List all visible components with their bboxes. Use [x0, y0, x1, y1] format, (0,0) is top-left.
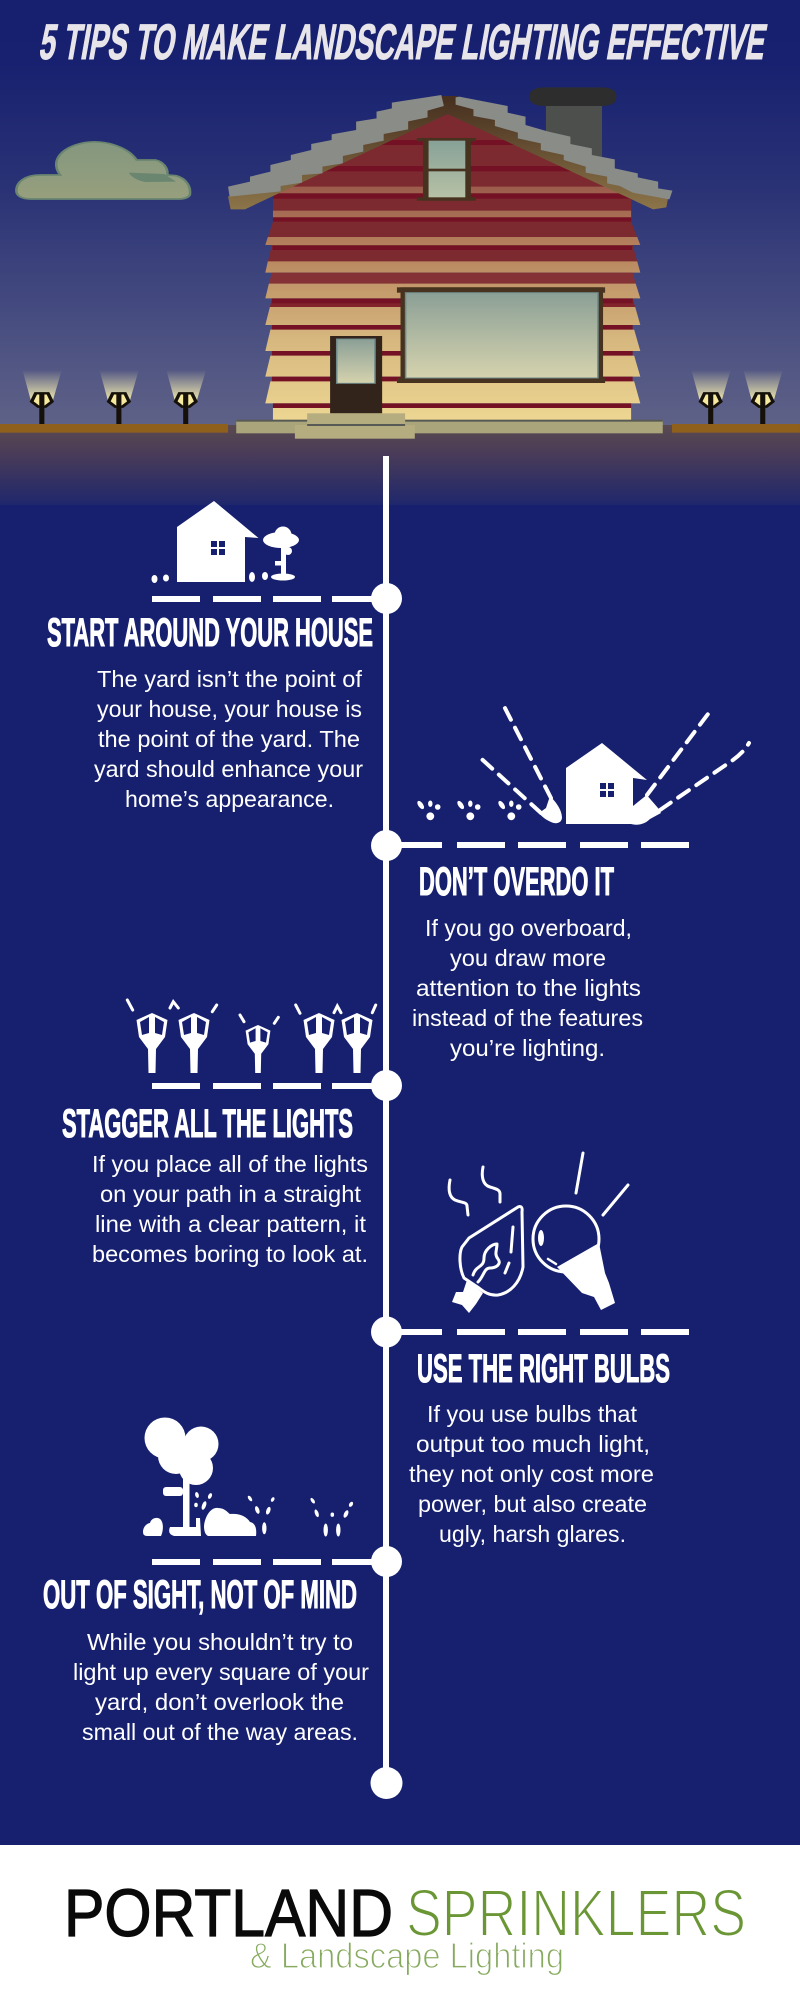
icon: tree, shrubs and small lights [143, 1418, 354, 1536]
body text [92, 1151, 368, 1267]
panel: tip 5 [43, 1418, 402, 1745]
body text: on your path in a straight [100, 1181, 362, 1207]
roof [228, 95, 672, 209]
ground strips [0, 424, 800, 433]
body text: While you shouldn’t try to [87, 1629, 353, 1655]
illustration: cloud and house [0, 87, 800, 439]
timeline node [371, 1070, 402, 1101]
logo wordmark black: PORTLAND [64, 1876, 393, 1951]
hot bulb [449, 1167, 523, 1295]
body text: becomes boring to look at. [92, 1241, 368, 1267]
cloud [16, 142, 190, 199]
body text: instead of the features [412, 1005, 643, 1031]
panel: tip 1 [47, 501, 402, 812]
path lights right [691, 370, 783, 424]
heading: DON’T OVERDO IT [419, 860, 614, 904]
foundation and steps [236, 413, 663, 439]
efficient bulb [533, 1153, 628, 1310]
heading: START AROUND YOUR HOUSE [47, 611, 373, 655]
body text: attention to the lights [416, 975, 641, 1001]
icon: house and tree [152, 501, 299, 583]
heading: STAGGER ALL THE LIGHTS [62, 1102, 353, 1146]
timeline node [371, 583, 402, 614]
sky gradient [0, 0, 800, 426]
timeline node [371, 1546, 402, 1577]
body text: line with a clear pattern, it [95, 1211, 367, 1237]
panel: tip 3 [62, 1000, 402, 1267]
body text: power, but also create [418, 1491, 647, 1517]
timeline node [371, 1316, 402, 1348]
door [330, 336, 382, 413]
body text: you draw more [450, 945, 606, 971]
path lights left [22, 370, 206, 424]
panel: tip 4 [371, 1153, 689, 1547]
upper window [417, 138, 476, 201]
body text: The yard isn’t the point of [97, 666, 363, 692]
timeline spine [383, 456, 389, 1783]
heading: OUT OF SIGHT, NOT OF MIND [43, 1573, 357, 1617]
connector dashes [152, 1559, 376, 1565]
body text: If you go overboard, [425, 915, 632, 941]
body text [94, 666, 363, 812]
connector dashes [152, 596, 376, 602]
icon: staggered path lights [127, 1000, 376, 1073]
body text: If you place all of the lights [92, 1151, 368, 1177]
body text: you’re lighting. [450, 1035, 605, 1061]
chimney [530, 87, 616, 163]
body text: the point of the yard. The [98, 726, 360, 752]
connector dashes [398, 842, 689, 848]
soil fade [0, 425, 800, 505]
body text: light up every square of your [73, 1659, 369, 1685]
panel: hero scene with house [0, 0, 800, 505]
body text: they not only cost more [409, 1461, 654, 1487]
body text [412, 915, 643, 1061]
house walls [265, 114, 640, 421]
body text: output too much light, [416, 1431, 650, 1457]
body text: ugly, harsh glares. [439, 1521, 626, 1547]
footer panel [0, 1845, 800, 2000]
body text [73, 1629, 369, 1745]
panel: tip 2 [371, 702, 749, 1061]
icon: overlit house with spotlights [416, 702, 749, 825]
main window [397, 287, 605, 383]
body text: small out of the way areas. [82, 1719, 358, 1745]
timeline node [371, 830, 402, 861]
body text: yard, don’t overlook the [95, 1689, 344, 1715]
logo tagline: & Landscape Lighting [250, 1935, 564, 1976]
body text [409, 1401, 654, 1547]
body text: If you use bulbs that [427, 1401, 638, 1427]
bulb base [452, 1280, 483, 1313]
body text: your house, your house is [97, 696, 362, 722]
connector dashes [152, 1083, 376, 1089]
timeline end node [370, 1767, 402, 1799]
icon: two light bulbs [449, 1153, 628, 1313]
connector dashes [398, 1329, 689, 1335]
body text: yard should enhance your [94, 756, 363, 782]
body text: home’s appearance. [125, 786, 334, 812]
